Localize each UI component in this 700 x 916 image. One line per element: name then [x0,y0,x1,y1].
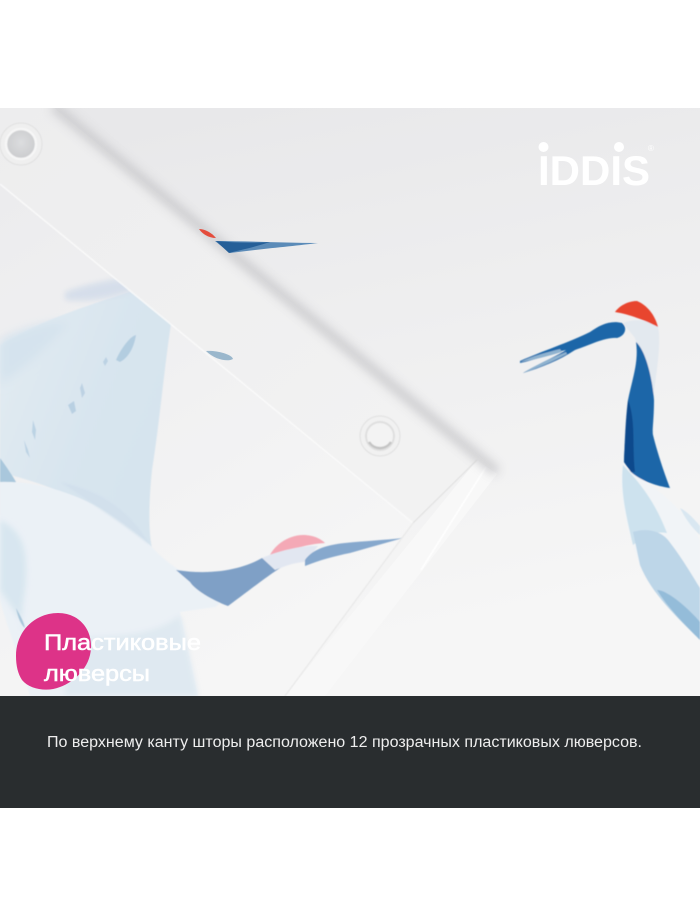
heading: люверсы [44,661,150,686]
red cap [615,301,658,327]
caption text: По верхнему канту шторы расположено 12 прозрачных пластиковых люверсов. [47,734,642,751]
feather mark on fold [206,351,233,360]
upper wing [0,290,172,548]
crane with spread wings [0,278,403,696]
neck blue [624,342,670,488]
crane fragment: red cap and blue beak on fold [199,229,318,253]
eyelet bottom right [360,416,400,456]
neck white [623,320,659,400]
logo: iDDIS: IDDIS [538,147,650,194]
eyelet top left [0,123,42,165]
logo: iDDIS: ® [648,144,654,153]
body [626,465,650,484]
dark caption band [0,696,700,808]
head [520,322,625,373]
crane standing at right [520,301,700,640]
fold flap [0,108,497,523]
photo: curtain fabric [0,106,700,696]
hem strip [285,460,497,696]
body and lower wing [0,482,221,696]
heading [44,630,201,686]
fold shadow [53,106,497,472]
heading: Пластиковые [44,630,201,655]
pink blob badge [16,613,91,690]
infographic canvas [0,108,700,808]
neck and head [176,558,290,606]
lower curtain layer [0,183,413,696]
